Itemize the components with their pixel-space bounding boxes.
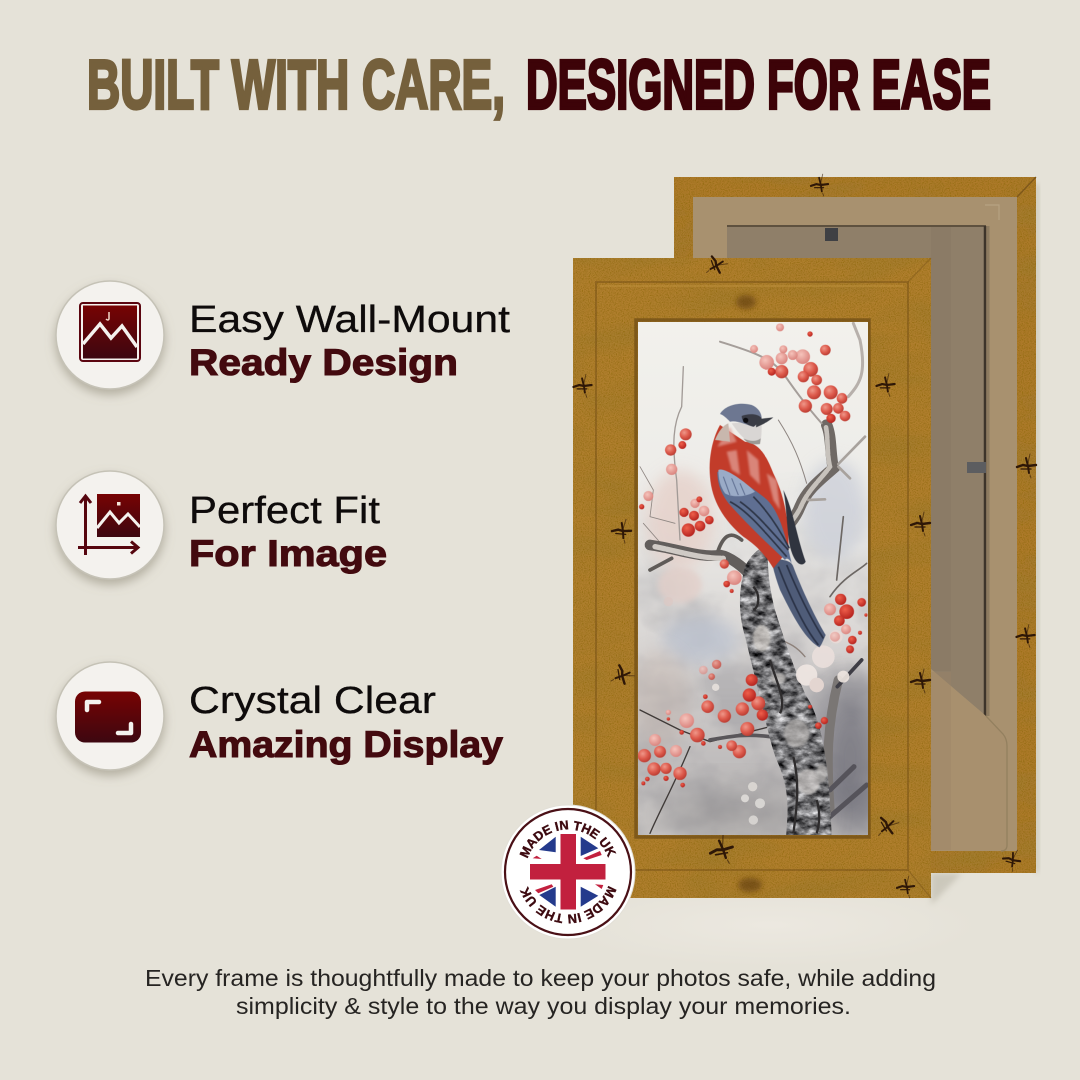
footer text	[145, 965, 936, 1019]
icon: wall mount picture	[80, 303, 140, 361]
pale blossoms	[664, 597, 849, 825]
corner marks	[985, 205, 999, 220]
red bird	[710, 404, 826, 647]
frame moulding	[573, 258, 931, 898]
watercolour washes	[638, 458, 868, 835]
dark primaries	[783, 490, 806, 564]
trunk	[740, 545, 832, 836]
text: ready design: Ready Design	[189, 342, 458, 383]
pale glow under frame	[560, 883, 980, 967]
icon: display screen	[75, 692, 141, 742]
metal hanger tabs	[825, 228, 986, 473]
back frame moulding	[674, 177, 1036, 873]
back frame knots	[811, 174, 1036, 873]
title part: built with care: BUILT WITH CARE,	[87, 46, 505, 124]
made in the uk badge: MADE IN THE UK	[520, 886, 617, 924]
beak	[756, 417, 773, 427]
text: perfect fit: Perfect Fit	[189, 490, 380, 532]
icon circle: perfect fit	[56, 471, 164, 579]
recess panel	[727, 226, 986, 716]
made in the uk badge	[502, 804, 636, 938]
moulding shading	[596, 258, 931, 898]
branches	[640, 323, 867, 833]
icon circle: wall mount	[56, 281, 164, 389]
text: easy wall-mount: Easy Wall-Mount	[189, 299, 510, 341]
icon: image with dimension arrows	[78, 494, 140, 555]
feature: perfect fit	[56, 471, 387, 579]
badge ring text: MADE IN THE UK	[519, 820, 616, 858]
feature: easy wall-mount	[56, 281, 510, 389]
head	[720, 404, 762, 427]
footer line 1: Every frame is thoughtfully made to keep your photos safe, while adding	[145, 965, 936, 991]
text: for image: For Image	[189, 533, 387, 574]
back of frame	[674, 174, 1039, 905]
backing board	[693, 197, 1017, 851]
front frame	[573, 252, 931, 898]
text: crystal clear: Crystal Clear	[189, 680, 436, 722]
red body	[710, 425, 788, 568]
footer line 2: simplicity & style to the way you display your memories.	[236, 993, 851, 1019]
title	[87, 46, 991, 124]
blue wing	[717, 472, 792, 563]
white throat	[732, 422, 762, 442]
artwork: red bird on blossom branch	[638, 322, 868, 835]
folding stand	[931, 669, 1007, 851]
feature: crystal clear	[56, 662, 503, 770]
frame knots	[574, 252, 930, 898]
text: amazing display: Amazing Display	[189, 724, 503, 765]
icon circle: crystal clear	[56, 662, 164, 770]
union jack flag	[530, 834, 606, 910]
berries	[638, 323, 868, 787]
tail	[773, 559, 826, 648]
